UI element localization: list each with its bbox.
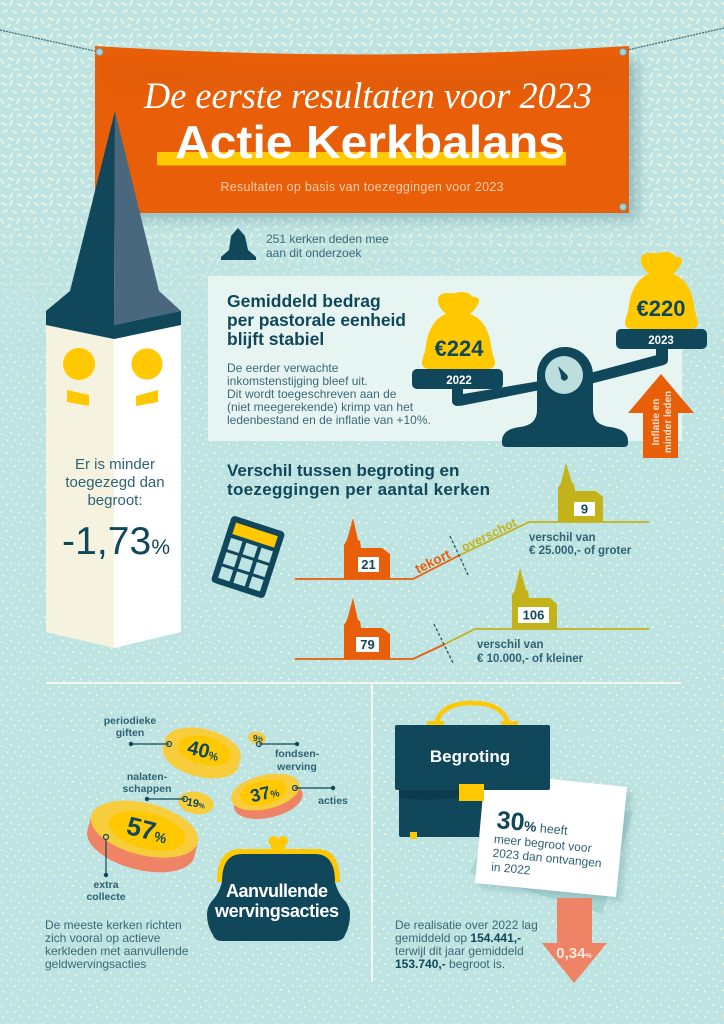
- icon: briefcase bottom: [399, 785, 545, 839]
- banner heading: Actie Kerkbalans: [175, 116, 565, 168]
- church tower: [46, 111, 181, 648]
- callout: fondsenwerving: [256, 742, 320, 773]
- text: realisation: terwijl dit jaar gemiddeld: [395, 944, 524, 958]
- money bag 2023: [625, 252, 698, 329]
- arrow: inflation and fewer members: Inflatie en: [651, 399, 662, 445]
- callout: extra collecte: [86, 834, 126, 903]
- text: 10.000 or less: verschil van: [477, 639, 543, 651]
- church: 79: [344, 598, 390, 659]
- card: 30 percent: [475, 772, 632, 902]
- panel heading: [227, 291, 406, 349]
- text: most churches: zich vooral op actieve: [45, 931, 161, 945]
- banner rope: [0, 28, 724, 52]
- icon: calculator: [211, 515, 285, 599]
- panel heading: per pastorale eenheid: [227, 310, 406, 330]
- callout: extra collecte: collecte: [86, 891, 126, 903]
- text: most churches: De meeste kerken richten: [45, 918, 182, 932]
- balance scale: 2023: [648, 335, 674, 347]
- participation text: [266, 232, 389, 260]
- callout: fondsenwerving: fondsen-: [275, 748, 320, 760]
- tower percentage: -1,73%: [62, 520, 170, 563]
- church: 9: 9: [581, 502, 588, 516]
- callout: acties: acties: [318, 795, 348, 807]
- arrow: inflation and fewer members: minder leden: [663, 391, 674, 453]
- panel body text: Dit wordt toegeschreven aan de: [227, 387, 397, 401]
- arrow: 0,34 percent: [542, 898, 607, 983]
- text: realisation: [395, 918, 538, 971]
- coin: 40 percent: 40%: [185, 737, 222, 766]
- tower text: Er is minder: [75, 456, 155, 473]
- heading: difference: toezeggingen per aantal kerken: [227, 480, 490, 499]
- tower text: toegezegd dan: [65, 474, 165, 491]
- tower text: [65, 456, 165, 509]
- church: 21: [344, 518, 390, 579]
- callout: nalatenschappen: nalaten-: [127, 771, 168, 783]
- heading: difference: [227, 461, 490, 499]
- callout: nalatenschappen: schappen: [122, 783, 172, 795]
- card: 30 percent: in 2022: [491, 860, 531, 877]
- church: 106: [512, 568, 557, 629]
- card: 30 percent: 2023 dan ontvangen: [492, 846, 602, 870]
- callout: extra collecte: extra: [93, 879, 119, 891]
- callout: acties: [292, 786, 348, 807]
- coin: 9 percent: 9%: [253, 733, 264, 743]
- text: 25.000 or more: verschil van: [529, 532, 595, 544]
- balance scale: 2022: [446, 375, 472, 387]
- arrow: 0,34 percent: 0,34%: [556, 945, 592, 962]
- panel body text: De eerder verwachte: [227, 361, 339, 375]
- text: realisation: 153.740,- begroot is.: [395, 957, 505, 971]
- callout: fondsenwerving: werving: [276, 761, 317, 773]
- card: 30 percent: 30% heeft: [495, 806, 570, 841]
- participation text: 251 kerken deden mee: [266, 232, 389, 246]
- participation text: aan dit onderzoek: [266, 246, 362, 260]
- money bag 2023: €220: [637, 296, 685, 321]
- dividers: [46, 683, 681, 982]
- label: tekort: tekort: [413, 546, 453, 577]
- text: 10.000 or less: € 10.000,- of kleiner: [477, 653, 584, 665]
- callout: periodieke giften: periodieke: [104, 715, 156, 727]
- panel body text: [227, 361, 431, 427]
- panel heading: Gemiddeld bedrag: [227, 291, 381, 311]
- banner title: De eerste resultaten voor 2023: [143, 76, 592, 117]
- text: most churches: geldwervingsacties: [45, 957, 146, 971]
- money bag 2022: [422, 292, 495, 369]
- banner: [95, 46, 638, 220]
- panel body text: inkomstenstijging bleef uit.: [227, 374, 368, 388]
- tower text: begroot:: [87, 492, 143, 509]
- panel body text: (niet meegerekende) krimp van het: [227, 400, 414, 414]
- coin: 37 percent: 37%: [248, 780, 281, 806]
- callout: periodieke giften: [104, 715, 172, 746]
- coin: 57 percent: [81, 791, 204, 882]
- left pan: [412, 369, 503, 389]
- church: 9: [558, 463, 603, 522]
- scale dial: [545, 356, 583, 394]
- card: 30 percent: meer begroot voor: [493, 832, 592, 855]
- text: realisation: gemiddeld op 154.441,-: [395, 931, 521, 945]
- paper behind card: [470, 800, 633, 914]
- label: overschot: overschot: [459, 515, 520, 554]
- panel: average amount: [208, 276, 682, 441]
- callout: periodieke giften: giften: [116, 727, 144, 739]
- coin: 19 percent: 19%: [186, 796, 207, 812]
- chart line: small difference: [295, 624, 649, 663]
- text: most churches: [45, 918, 189, 971]
- chart line: large difference: [295, 522, 649, 579]
- callout: nalatenschappen: [122, 771, 188, 802]
- panel heading: blijft stabiel: [227, 329, 324, 349]
- icon: participating churches: [221, 228, 256, 260]
- purse label: [214, 881, 339, 921]
- banner heading band: [157, 152, 566, 166]
- text: realisation: De realisatie over 2022 lag: [395, 918, 538, 932]
- icon: purse: [207, 836, 350, 941]
- right pan: [616, 329, 707, 349]
- text: 25.000 or more: € 25.000,- of groter: [529, 545, 632, 557]
- balance scale: [412, 329, 707, 447]
- church: 21: 21: [361, 557, 376, 572]
- briefcase label: Begroting: [430, 747, 510, 766]
- coin: 37 percent: [227, 767, 306, 825]
- coin: 19 percent: [176, 789, 216, 817]
- panel body text: ledenbestand en de inflatie van +10%.: [227, 413, 431, 427]
- coin: 57 percent: 57%: [124, 810, 172, 850]
- coin: 9 percent: [247, 731, 267, 745]
- purse label: Aanvullende: [226, 881, 328, 901]
- church: 106: 106: [523, 608, 544, 622]
- icon: briefcase top: [395, 703, 550, 801]
- text: 10.000 or less: [477, 639, 584, 665]
- text: most churches: kerkleden met aanvullende: [45, 944, 189, 958]
- church: 79: 79: [360, 637, 375, 652]
- purse label: wervingsacties: [214, 901, 339, 921]
- banner subtitle: Resultaten op basis van toezeggingen voor 2023: [220, 180, 504, 194]
- coin: 40 percent: [158, 720, 245, 786]
- arrow: inflation and fewer members: [628, 374, 694, 458]
- text: 25.000 or more: [529, 532, 632, 557]
- heading: difference: Verschil tussen begroting en: [227, 461, 459, 480]
- money bag 2022: €224: [435, 336, 484, 361]
